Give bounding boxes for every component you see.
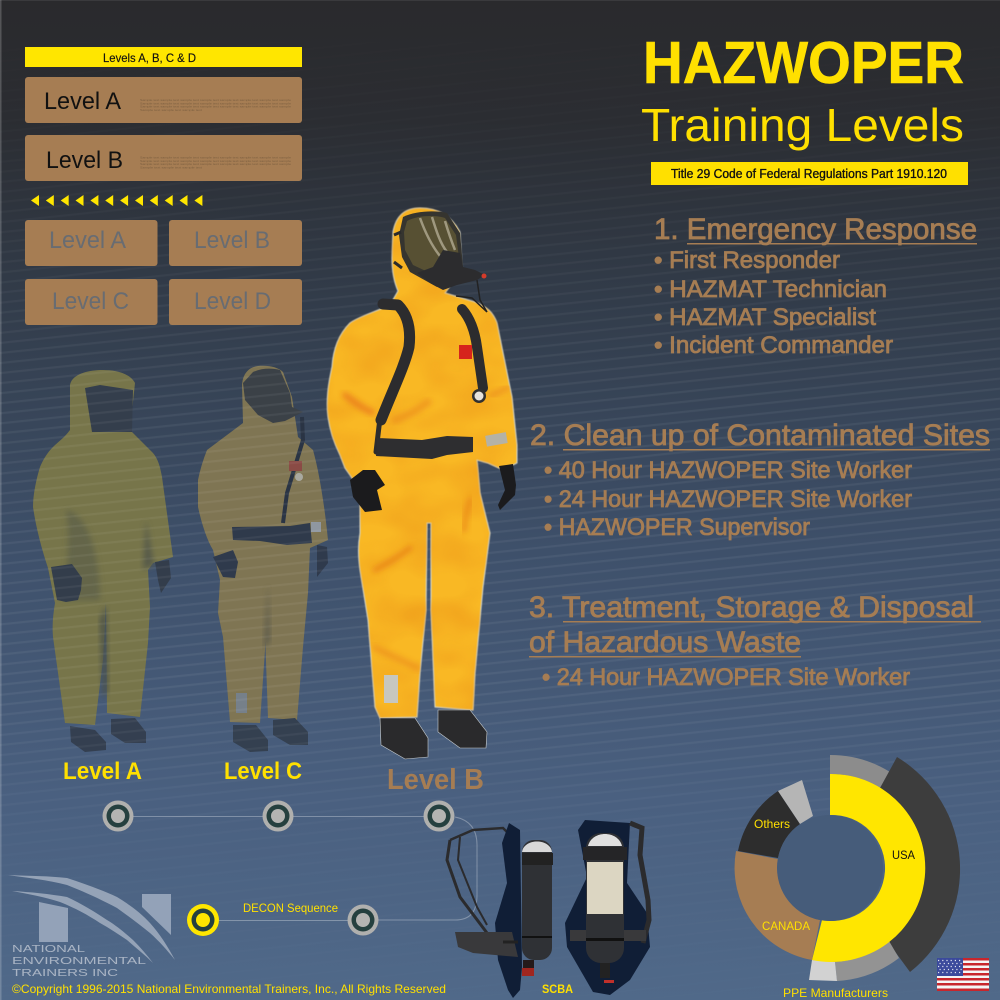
chart labels: USA: [892, 848, 915, 862]
icon: USA flag: [937, 958, 989, 991]
logo: National Environmental Trainers: [8, 875, 175, 979]
card: Level B: Sample text sample text sample text sample text sample text sample text sample text sample: [140, 162, 291, 166]
logo: National Environmental Trainers: ENVIRONMENTAL: [12, 956, 147, 967]
text block: 2. Clean up of Contaminated Sites: • 40 Hour HAZWOPER Site Worker: [544, 457, 912, 484]
text block: 2. Clean up of Contaminated Sites: • HAZWOPER Supervisor: [544, 514, 810, 541]
button: Level A: [25, 220, 158, 266]
text block: 1. Emergency Response: • HAZMAT Specialist: [654, 304, 876, 331]
button: Level D: [169, 279, 302, 325]
arrow row: [31, 195, 202, 206]
logo: National Environmental Trainers: TRAINERS INC: [12, 968, 118, 979]
level selector panel: [25, 47, 302, 325]
card: Level A: Level A: [44, 88, 121, 115]
donut chart: PPE manufacturers: [735, 755, 960, 1000]
text block: 1. Emergency Response: 1. Emergency Response: [654, 213, 977, 246]
chest patch and gauge: [384, 345, 508, 703]
card: Level B: [25, 135, 302, 181]
card: Level A: Sample text sample text sample text sample text sample text sample text sample text sample: [140, 101, 291, 105]
gloves: [350, 464, 516, 512]
chart labels: [754, 817, 915, 1000]
button: Level C: [25, 279, 158, 325]
text block: 1. Emergency Response: • Incident Commander: [654, 332, 893, 359]
text block: 1. Emergency Response: • HAZMAT Technician: [654, 276, 887, 303]
level labels: [63, 758, 484, 796]
SCBA side view: [447, 823, 553, 998]
title block: [641, 30, 968, 185]
level labels: Level C: [224, 758, 302, 785]
figure: Level B suit: [327, 208, 517, 759]
card: Level B: Level B: [46, 147, 123, 174]
card: Level B: Sample text sample text sample text sample text sample text sample text sample text sample: [140, 159, 291, 163]
text block: 2. Clean up of Contaminated Sites: [530, 419, 990, 541]
text block: 2. Clean up of Contaminated Sites: 2. Clean up of Contaminated Sites: [530, 419, 990, 452]
text block: 2. Clean up of Contaminated Sites: • 24 Hour HAZWOPER Site Worker: [544, 486, 912, 513]
heading: HAZWOPER: HAZWOPER: [643, 30, 964, 96]
timeline nodes: DECON sequence: DECON Sequence: [243, 901, 338, 915]
card: Level B: Sample text sample text sample text: [140, 165, 202, 169]
button: Level C: Level C: [52, 288, 129, 315]
button: Level B: [169, 220, 302, 266]
heading: Training Levels: Training Levels: [641, 99, 964, 151]
inner ring segments: [735, 774, 925, 962]
figure: Level C suit (faded): [198, 366, 328, 752]
chart labels: CANADA: [762, 919, 810, 933]
card: Level A: Sample text sample text sample text sample text sample text sample text sample text sample: [140, 98, 291, 102]
text block: 3. Treatment, Storage & Disposal: 3. Treatment, Storage & Disposal: [529, 591, 974, 624]
card: Level B: Sample text sample text sample text sample text sample text sample text sample text sample: [140, 156, 291, 160]
regulation bar: [651, 162, 968, 185]
button: Level A: Level A: [49, 227, 126, 254]
card: Level A: Sample text sample text sample text: [140, 108, 202, 112]
boots: [380, 710, 487, 759]
chart labels: PPE Manufacturers: [783, 986, 888, 1000]
card: Level A: Sample text sample text sample text sample text sample text sample text sample text sample: [140, 105, 291, 109]
figure: Level A suit (faded): [33, 370, 173, 752]
SCBA front view: [565, 820, 650, 995]
button: Level D: Level D: [194, 288, 271, 315]
text block: 1. Emergency Response: • First Responder: [654, 247, 840, 274]
outer ring segments: [809, 755, 960, 981]
level labels: Level B: [387, 764, 484, 796]
text block: 3. Treatment, Storage & Disposal: • 24 Hour HAZWOPER Site Worker: [542, 664, 910, 691]
text block: 3. Treatment, Storage & Disposal: [529, 591, 981, 691]
SCBA label: SCBA: [542, 982, 573, 996]
regulation bar: Title 29 Code of Federal Regulations Part 1910.120: [671, 167, 947, 181]
card: Level A: [25, 77, 302, 123]
harness straps: [376, 304, 483, 452]
chart labels: Others: [754, 817, 790, 831]
button: Level B: Level B: [194, 227, 270, 254]
waist belt: [376, 436, 473, 459]
header bar: Levels A, B, C & D: Levels A, B, C & D: [103, 51, 196, 65]
level labels: Level A: [63, 758, 142, 785]
header bar: Levels A, B, C & D: [25, 47, 302, 67]
text block: 3. Treatment, Storage & Disposal: of Hazardous Waste: [529, 626, 801, 659]
timeline nodes: suit levels: [102, 800, 454, 832]
connector lines: [133, 816, 477, 920]
visor and mask: [394, 211, 487, 312]
text block: 1. Emergency Response: [654, 213, 977, 359]
logo: National Environmental Trainers: NATIONAL: [12, 944, 86, 955]
copyright: ©Copyright 1996-2015 National Environmental Trainers, Inc., All Rights Reserved: [12, 982, 446, 996]
timeline nodes: DECON sequence: [187, 901, 378, 936]
